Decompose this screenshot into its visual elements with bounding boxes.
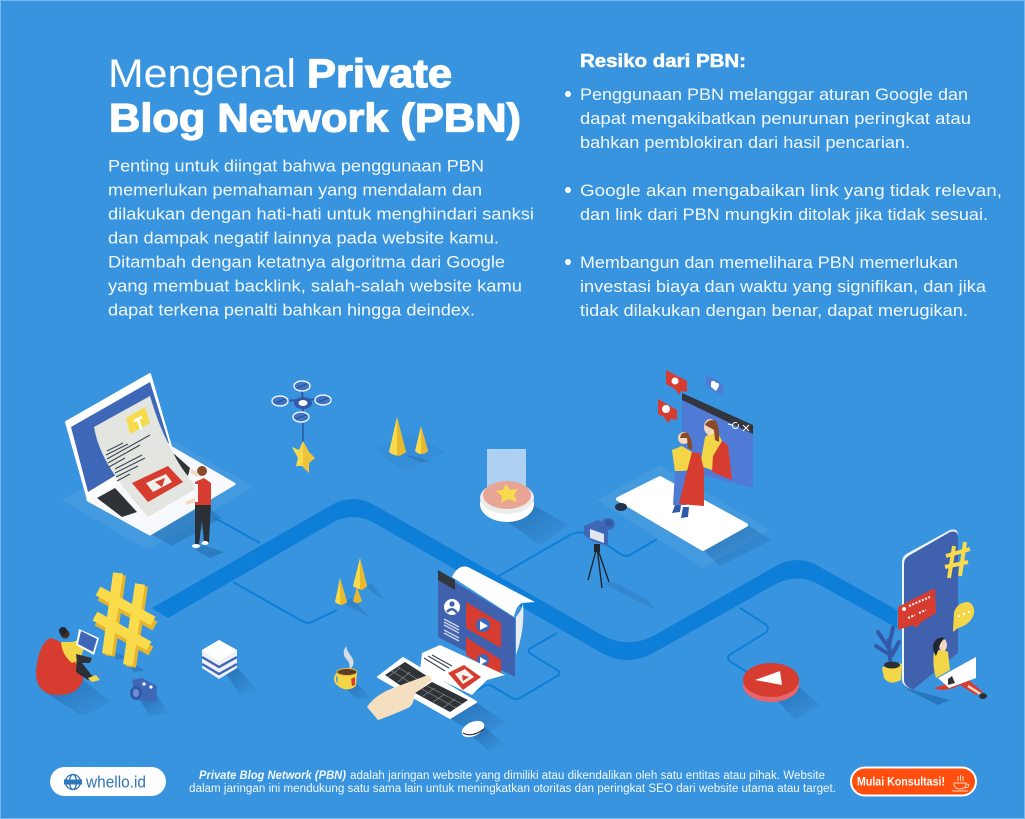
influencer on phone [597, 370, 772, 568]
intro paragraph: memerlukan pemahaman yang mendalam dan [108, 180, 482, 200]
play button [743, 663, 820, 720]
footer note: dalam jaringan ini mendukung satu sama lain untuk meningkatkan otoritas dan peringkat SEO dari website utama atau target. [189, 783, 836, 795]
connector lines [213, 517, 768, 699]
risk 1 [565, 85, 971, 152]
title: Blog Network (PBN) [109, 96, 521, 140]
cones lower [335, 558, 384, 618]
network road [152, 499, 897, 660]
person on beanbag [36, 627, 112, 716]
consultation button [851, 768, 976, 796]
risk 3 [565, 253, 987, 320]
risk 2 [565, 181, 1002, 224]
logo pill [50, 767, 166, 796]
large hash symbol [95, 573, 155, 672]
title: Private [307, 52, 452, 96]
risk 1: bahkan pemblokiran dari hasil pencarian. [580, 133, 910, 152]
intro paragraph: yang membuat backlink, salah-salah website kamu [108, 276, 522, 296]
cones top [375, 417, 445, 472]
laptop with document [62, 374, 253, 550]
risk list [565, 85, 1002, 320]
risk 3: tidak dilakukan dengan benar, dapat merugikan. [580, 301, 968, 320]
footer note: Private Blog Network (PBN) [199, 770, 346, 782]
intro paragraph: Ditambah dengan ketatnya algoritma dari Google [108, 252, 505, 272]
content window and keyboard [367, 566, 535, 738]
risk 1: dapat mengakibatkan penurunan peringkat atau [580, 109, 971, 128]
coffee cup [335, 646, 372, 700]
mouse [459, 718, 505, 750]
small camera [130, 678, 170, 716]
icon: coffee cup [952, 775, 969, 791]
intro paragraph: dan dampak negatif lainnya pada website kamu. [108, 228, 499, 248]
risk 3: Membangun dan memelihara PBN memerlukan [580, 253, 958, 272]
risk 3: investasi biaya dan waktu yang signifikan, dan jika [580, 277, 987, 296]
risks heading: Resiko dari PBN: [580, 51, 746, 71]
risk 2: Google akan mengabaikan link yang tidak relevan, [580, 181, 1002, 200]
intro paragraph: Penting untuk diingat bahwa penggunaan PBN [108, 156, 484, 176]
logo pill: whello.id [85, 774, 146, 792]
risk 1: Penggunaan PBN melanggar aturan Google dan [580, 85, 968, 104]
star button [480, 449, 568, 545]
phone with user [876, 530, 987, 705]
intro paragraph [108, 156, 534, 320]
risk 2: dan link dari PBN mungkin ditolak jika tidak sesuai. [580, 205, 988, 224]
consultation button: Mulai Konsultasi! [857, 776, 945, 788]
server stack [202, 640, 258, 694]
person at laptop [185, 466, 224, 558]
drone with star [272, 381, 331, 473]
footer note [189, 770, 836, 795]
title [108, 52, 521, 140]
camera on tripod [584, 518, 655, 610]
footer note: adalah jaringan website yang dimiliki atau dikendalikan oleh satu entitas atau pihak. Website [350, 770, 825, 782]
icon: globe [64, 774, 82, 790]
intro paragraph: dilakukan dengan hati-hati untuk menghindari sanksi [108, 204, 534, 224]
title: Mengenal [108, 52, 296, 96]
intro paragraph: dapat terkena penalti bahkan hingga deindex. [108, 300, 475, 320]
